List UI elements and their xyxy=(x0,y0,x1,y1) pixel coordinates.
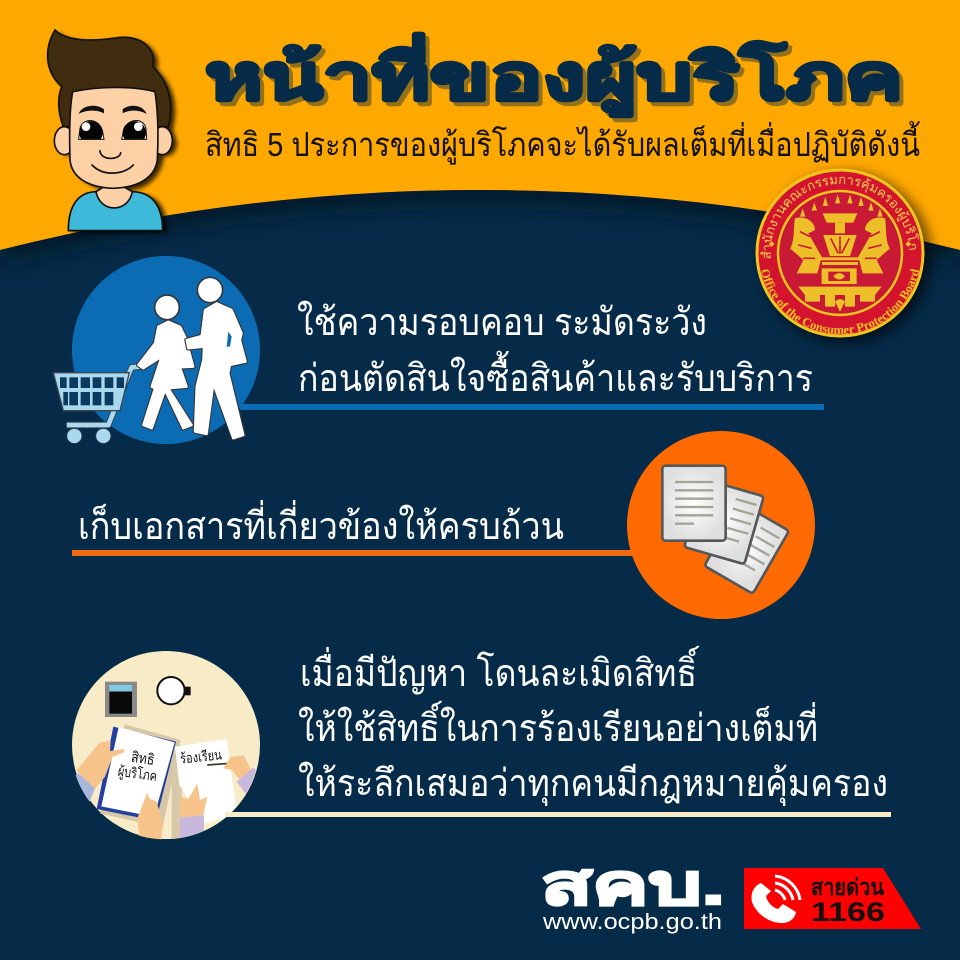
icon circle: documents xyxy=(627,431,815,619)
text block 3 xyxy=(298,645,888,806)
footer logo: www.ocpb.go.th xyxy=(542,909,722,934)
icon: phone xyxy=(751,876,800,923)
icon circle: shoppers with cart xyxy=(53,256,260,444)
icon circle: complaint documents on a desk xyxy=(67,651,267,845)
woman figure xyxy=(138,295,205,428)
rule 2 xyxy=(72,550,642,556)
rule 3 xyxy=(225,812,891,817)
character illustration xyxy=(48,30,177,233)
folder: สิทธิ xyxy=(130,750,155,769)
seal emblem xyxy=(768,195,912,312)
folder xyxy=(97,724,181,828)
text block 2: เก็บเอกสารที่เกี่ยวข้องให้ครบถ้วน xyxy=(78,500,564,548)
rule 1 xyxy=(240,404,824,410)
text block 3: ให้ระลึกเสมอว่าทุกคนมีกฎหมายคุ้มครอง xyxy=(298,762,888,806)
title xyxy=(205,33,907,121)
coffee cup xyxy=(157,677,191,704)
text block 3: เมื่อมีปัญหา โดนละเมิดสิทธิ์ xyxy=(300,645,700,695)
footer logo xyxy=(541,853,725,934)
seal: Office of the Consumer Protection Board xyxy=(756,164,940,348)
folder: ผู้บริโภค xyxy=(117,763,158,785)
text block 1: ก่อนตัดสินใจซื้อสินค้าและรับบริการ xyxy=(298,350,813,400)
title: หน้าที่ของผู้บริโภค xyxy=(209,37,907,121)
text block 1 xyxy=(297,301,813,400)
hands xyxy=(77,741,253,845)
hotline badge: สายด่วน xyxy=(811,874,884,900)
cart xyxy=(53,367,140,444)
dark navy curved body xyxy=(0,190,960,270)
hotline badge xyxy=(744,868,921,929)
header background xyxy=(0,0,960,260)
seal: Office of the Consumer Protection Board: Office of the Consumer Protection Board xyxy=(762,268,920,334)
title: หน้าที่ของผู้บริโภค xyxy=(205,33,903,117)
footer logo: สคบ. xyxy=(541,853,725,916)
text block 1: ใช้ความรอบคอบ ระมัดระวัง xyxy=(297,301,707,344)
man figure xyxy=(187,277,246,438)
text block 3: ให้ใช้สิทธิ์ในการร้องเรียนอย่างเต็มที่ xyxy=(298,700,818,750)
complaint paper: ร้องเรียน xyxy=(179,746,223,767)
complaint paper xyxy=(175,739,237,824)
hotline badge: 1166 xyxy=(811,897,885,927)
calculator xyxy=(105,682,137,717)
